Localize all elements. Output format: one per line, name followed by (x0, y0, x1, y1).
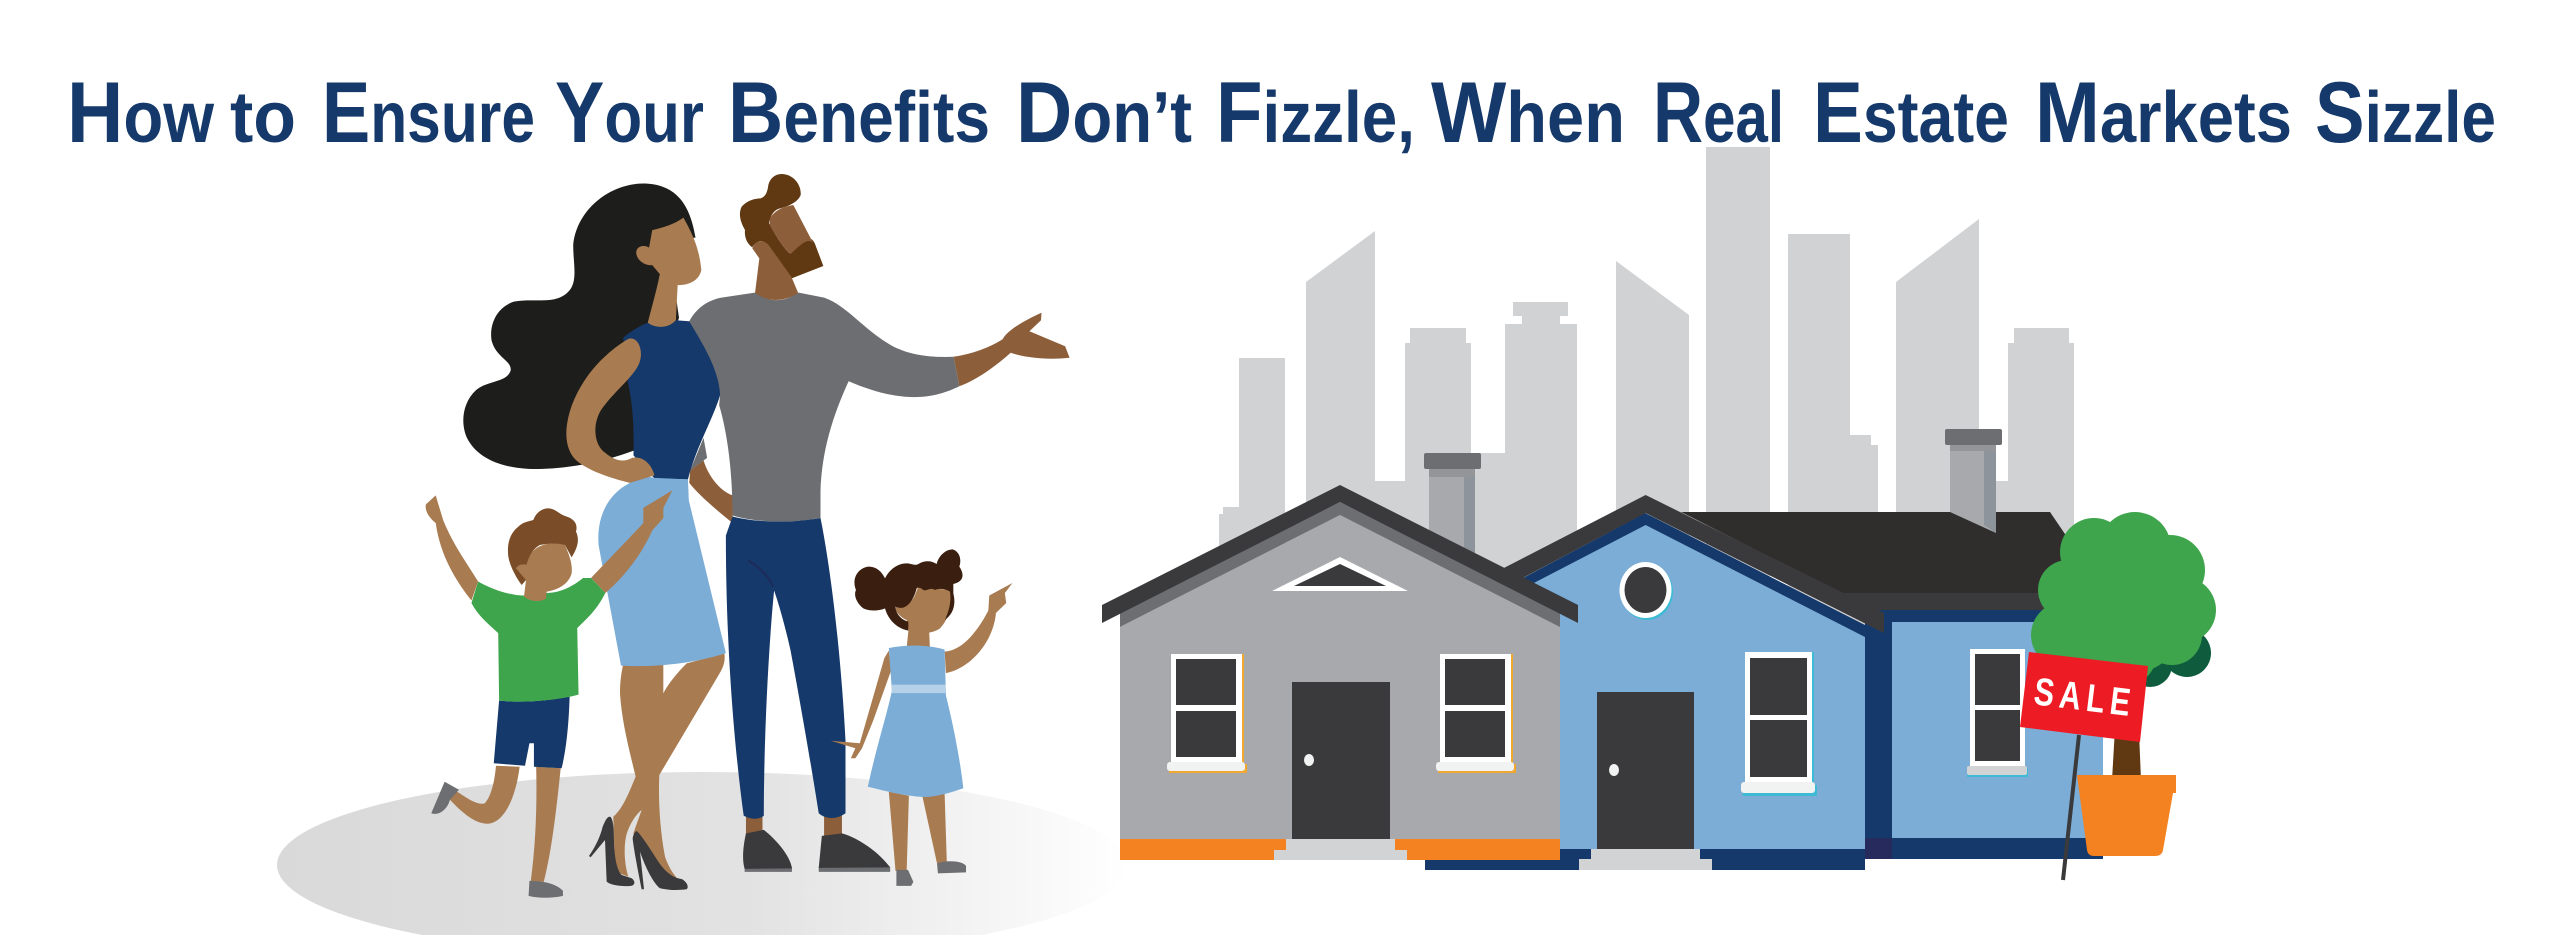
steps (1274, 839, 1407, 860)
title: Ensure (322, 65, 535, 161)
blue house side wing (1681, 429, 2103, 859)
door (1292, 682, 1390, 839)
front steps (1579, 849, 1712, 870)
title: Real (1653, 65, 1784, 161)
front door (1597, 692, 1694, 849)
boy head (508, 508, 578, 601)
title: How (67, 65, 215, 161)
girl head (854, 549, 963, 633)
side window (1967, 649, 2028, 777)
title: Don’t (1016, 65, 1192, 161)
oval window (1620, 562, 1673, 620)
title: Benefits (728, 65, 990, 161)
title: Fizzle, (1216, 65, 1415, 161)
front window (1741, 652, 1817, 796)
man (689, 174, 1070, 872)
blue house front (1425, 495, 1892, 870)
sale sign: SALE (2032, 670, 2138, 726)
title: Markets (2035, 65, 2292, 161)
family (426, 174, 1070, 898)
orange foundation (1120, 839, 1560, 860)
woman legs and heels (589, 653, 725, 890)
title: When (1431, 65, 1625, 161)
sale sign (2020, 652, 2148, 880)
man head (740, 174, 823, 300)
woman (566, 218, 726, 890)
boy (426, 490, 672, 898)
title: Your (555, 65, 704, 161)
gable window (1272, 557, 1408, 591)
title (67, 65, 2496, 161)
woman hair (463, 184, 696, 469)
girl (831, 549, 1012, 886)
ground shadow (277, 772, 1127, 935)
potted tree (2031, 512, 2216, 856)
chimney: grey house (1424, 453, 1481, 589)
skyline (1219, 147, 2074, 640)
chimney: blue house (1945, 429, 2002, 533)
title: Estate (1813, 65, 2009, 161)
title: to (230, 78, 296, 158)
left window (1167, 654, 1247, 773)
grey house (1102, 485, 1578, 860)
title: Sizzle (2315, 65, 2496, 161)
right window (1436, 654, 1516, 773)
